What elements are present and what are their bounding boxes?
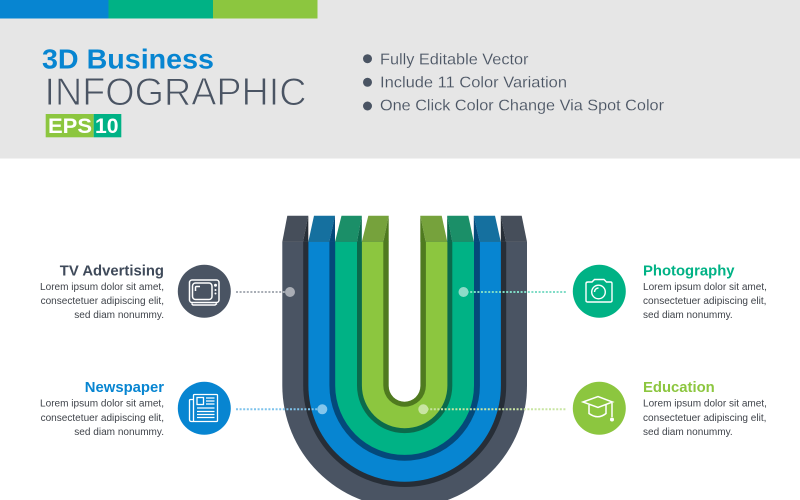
block: Education text: consectetuer adipiscing elit, xyxy=(643,413,766,424)
lime band xyxy=(362,242,447,428)
icon: newspaper xyxy=(178,382,231,435)
title: 3D Business xyxy=(42,44,214,74)
icon: television xyxy=(178,265,231,318)
block: Newspaper text: consectetuer adipiscing elit, xyxy=(41,413,164,424)
connector: Newspaper xyxy=(236,404,327,414)
badge: EPS10 xyxy=(46,114,121,138)
badge: EPS10: EPS xyxy=(48,115,92,138)
feature bullet list: Fully Editable Vector xyxy=(380,52,528,68)
feature bullet list: Include 11 Color Variation xyxy=(380,74,567,92)
block: Newspaper text: sed diam nonummy. xyxy=(74,427,164,438)
block: Education text: Education xyxy=(643,380,715,396)
badge: EPS10: 10 xyxy=(95,115,118,138)
block: Education text: sed diam nonummy. xyxy=(643,427,733,438)
top faces xyxy=(282,216,308,242)
title xyxy=(42,44,306,114)
connector: Photography xyxy=(458,287,567,297)
blue band xyxy=(308,242,501,482)
block: Newspaper text xyxy=(40,380,164,438)
icon: camera xyxy=(573,265,626,318)
3D U shape chart xyxy=(282,215,527,500)
connector: Education xyxy=(418,404,567,414)
block: Photography text: sed diam nonummy. xyxy=(643,310,733,321)
block: TV Advertising text: consectetuer adipiscing elit, xyxy=(41,296,164,307)
green band xyxy=(335,242,474,455)
block: Photography text: Lorem ipsum dolor sit amet, xyxy=(643,282,767,293)
title: INFOGRAPHIC xyxy=(44,71,306,114)
block: Photography text xyxy=(643,264,767,321)
block: Newspaper text: Lorem ipsum dolor sit amet, xyxy=(40,398,164,410)
feature bullet list: One Click Color Change Via Spot Color xyxy=(380,98,664,114)
block: Photography text: consectetuer adipiscing elit, xyxy=(643,296,766,307)
connector: TV Advertising xyxy=(236,287,295,297)
block: TV Advertising text: sed diam nonummy. xyxy=(74,310,164,321)
block: Photography text: Photography xyxy=(643,264,735,280)
grey outer band xyxy=(282,242,527,500)
feature bullet list xyxy=(363,52,664,114)
block: Newspaper text: Newspaper xyxy=(85,380,164,396)
block: Education text: Lorem ipsum dolor sit amet, xyxy=(643,398,767,410)
block: TV Advertising text: Lorem ipsum dolor sit amet, xyxy=(40,282,164,293)
header band xyxy=(0,0,800,158)
block: Education text xyxy=(643,380,767,438)
inner hole xyxy=(389,215,420,402)
icon: graduation cap xyxy=(573,382,626,435)
block: TV Advertising text: TV Advertising xyxy=(60,264,164,280)
block: TV Advertising text xyxy=(40,264,164,321)
